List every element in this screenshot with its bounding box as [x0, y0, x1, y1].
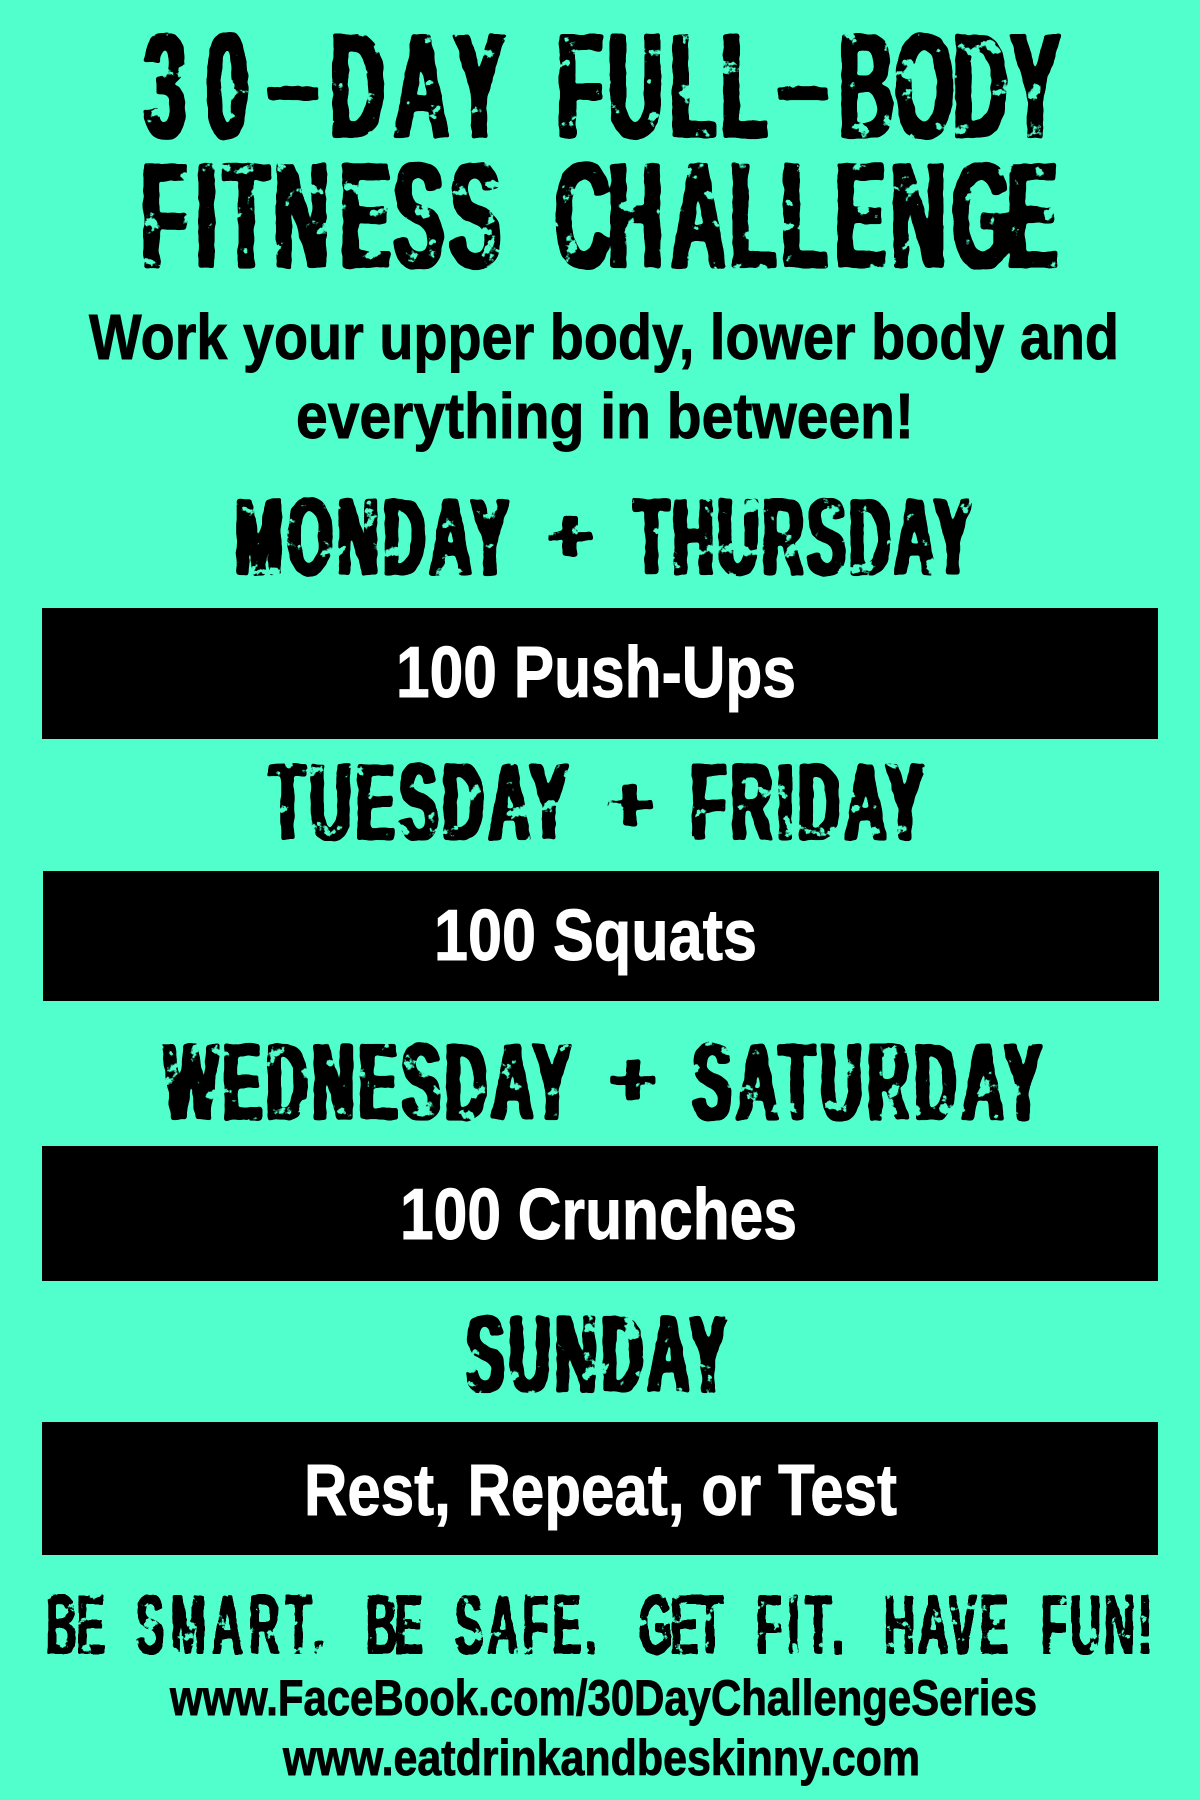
heading: tuesday and friday: FRIDAY — [691, 741, 924, 864]
panel: monday and thursday — [42, 476, 1158, 739]
bar: squats — [43, 871, 1159, 1001]
title: CHALLENGE — [555, 131, 1058, 301]
website links — [169, 1670, 1037, 1786]
bar: rest — [42, 1422, 1158, 1555]
slogan: BE — [366, 1578, 423, 1673]
title: DAY — [330, 3, 504, 171]
slogan: BE — [46, 1578, 105, 1673]
slogan — [46, 1578, 1152, 1673]
title: FULL — [557, 3, 767, 171]
heading: monday and thursday: THURSDAY — [634, 476, 972, 599]
heading: monday and thursday: + — [547, 491, 593, 580]
heading: wednesday and saturday — [164, 1021, 1042, 1144]
bar: squats: 100 Squats — [434, 896, 757, 976]
subtitle: everything in between! — [296, 380, 914, 452]
heading: monday and thursday: MONDAY — [235, 476, 509, 599]
bar: crunches: 100 Crunches — [400, 1175, 797, 1255]
panel: wednesday and saturday — [42, 1021, 1158, 1281]
slogan: FUN! — [1041, 1578, 1152, 1673]
title: - — [797, 22, 815, 145]
heading: wednesday and saturday: WEDNESDAY — [164, 1021, 571, 1144]
heading: tuesday and friday — [270, 741, 924, 864]
slogan: HAVE — [884, 1578, 1008, 1673]
slogan: SMART. — [136, 1578, 325, 1673]
subtitle — [89, 301, 1119, 452]
slogan: FIT. — [756, 1578, 844, 1673]
panel: sunday — [42, 1293, 1158, 1555]
title: BODY — [839, 3, 1060, 171]
heading: wednesday and saturday: + — [610, 1035, 656, 1124]
heading: sunday: SUNDAY — [466, 1293, 727, 1416]
bar: crunches — [42, 1146, 1158, 1281]
slogan: GET — [639, 1578, 723, 1673]
bar: push-ups: 100 Push-Ups — [396, 633, 796, 713]
heading: monday and thursday — [235, 476, 972, 599]
title: - — [282, 22, 300, 145]
bar: push-ups — [42, 608, 1158, 739]
bar: rest: Rest, Repeat, or Test — [304, 1451, 897, 1531]
title: 30 — [144, 3, 248, 171]
title: FITNESS — [141, 131, 501, 301]
panel: tuesday and friday — [43, 741, 1159, 1001]
website links: www.eatdrinkandbeskinny.com — [282, 1730, 920, 1786]
slogan: SAFE. — [455, 1578, 597, 1673]
title — [141, 3, 1060, 301]
website links: www.FaceBook.com/30DayChallengeSeries — [169, 1670, 1037, 1726]
heading: tuesday and friday: + — [607, 760, 653, 849]
heading: wednesday and saturday: SATURDAY — [693, 1021, 1042, 1144]
heading: tuesday and friday: TUESDAY — [270, 741, 568, 864]
